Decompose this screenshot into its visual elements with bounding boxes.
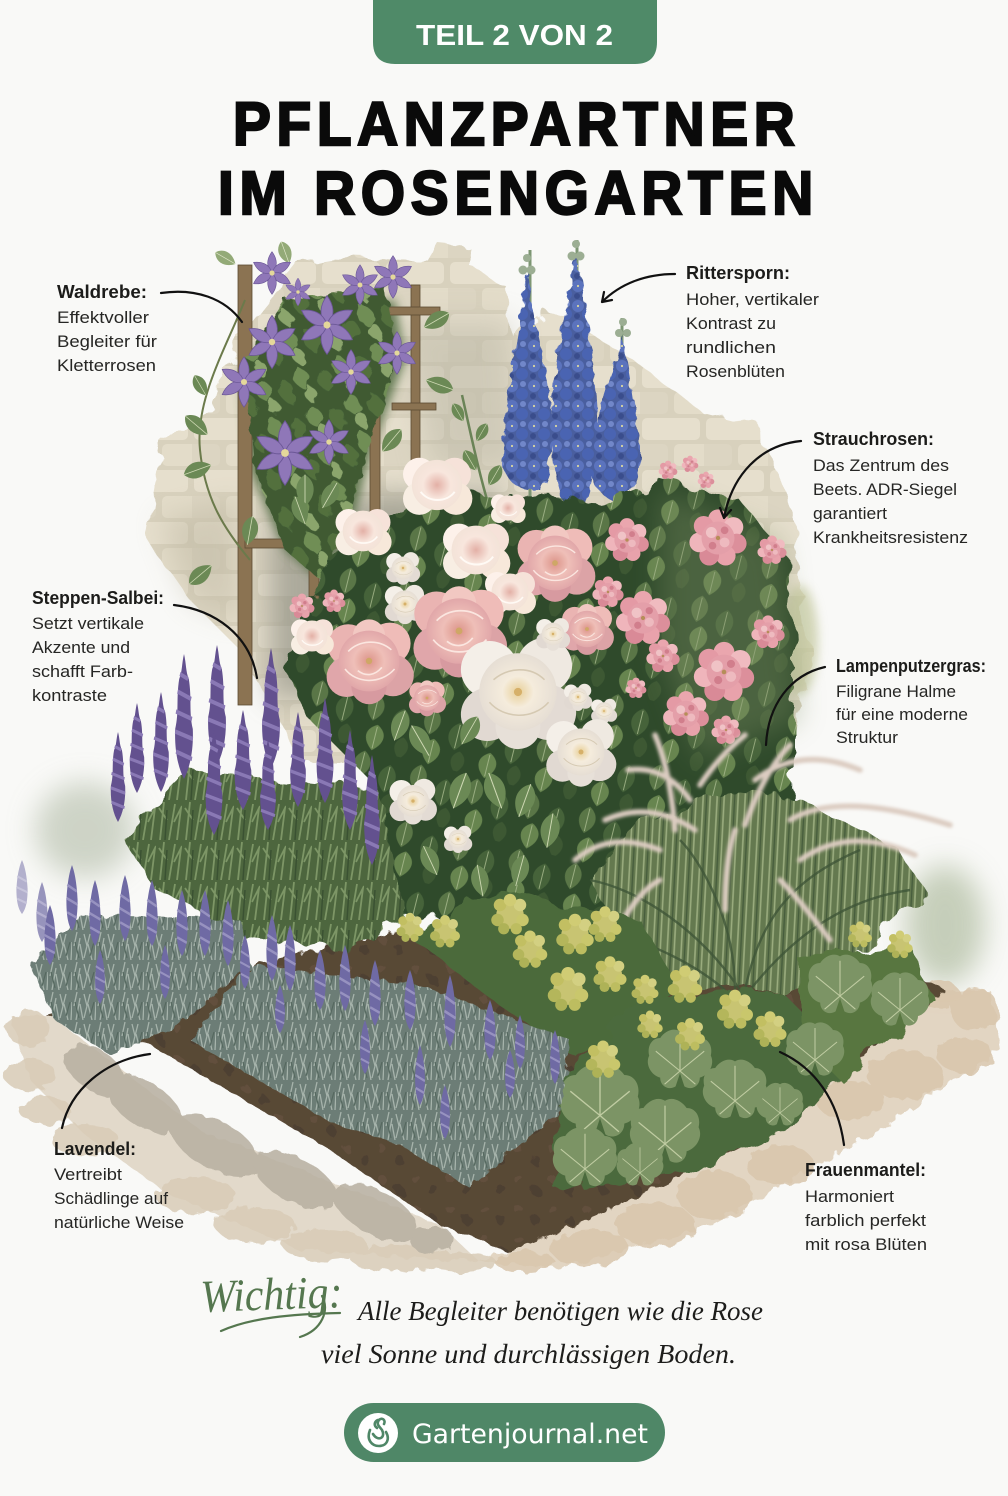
label: Waldrebe xyxy=(57,282,157,375)
label: Rittersporn: rundlichen xyxy=(686,338,776,357)
label: Steppen-Salbei: Setzt vertikale xyxy=(32,614,144,633)
label: Rittersporn: Rosenblüten xyxy=(686,362,785,381)
label: Steppen-Salbei: Akzente und xyxy=(32,638,130,657)
label: Strauchrosen: Strauchrosen: xyxy=(813,429,934,449)
label: Rittersporn: Rittersporn: xyxy=(686,263,790,283)
lavender xyxy=(10,860,590,1200)
lady's mantle xyxy=(396,890,935,1190)
label: Steppen-Salbei xyxy=(32,588,164,705)
handwritten note: Alle Begleiter benötigen wie die Rose xyxy=(356,1296,763,1326)
label: Rittersporn xyxy=(686,263,819,381)
arrow: Steppen-Salbei xyxy=(174,605,257,678)
arrow: Waldrebe xyxy=(161,292,242,322)
delphinium spikes xyxy=(452,240,642,502)
label: Strauchrosen: Beets. ADR-Siegel xyxy=(813,480,957,499)
title badge: TEIL 2 VON 2 xyxy=(416,20,613,52)
label: Lavendel: natürliche Weise xyxy=(54,1213,184,1232)
brand pill xyxy=(344,1403,665,1462)
label: Steppen-Salbei: schafft Farb- xyxy=(32,662,133,681)
label: Lavendel: Lavendel: xyxy=(54,1139,136,1159)
label: Strauchrosen: Das Zentrum des xyxy=(813,456,949,475)
label: Waldrebe: Waldrebe: xyxy=(57,282,147,302)
paving stones xyxy=(4,981,1000,1272)
label: Waldrebe: Effektvoller xyxy=(57,308,149,327)
label: Lavendel xyxy=(54,1139,184,1232)
label: Lampenputzergras: für eine moderne xyxy=(836,705,968,724)
main title: IM ROSENGARTEN xyxy=(218,160,813,227)
label: Steppen-Salbei: Steppen-Salbei: xyxy=(32,588,164,608)
label: Lampenputzergras: Lampenputzergras: xyxy=(836,656,986,676)
label: Lavendel: Vertreibt xyxy=(54,1165,122,1184)
pheasant grass xyxy=(570,735,950,1000)
arrow: Strauchrosen xyxy=(720,441,801,518)
arrow: Lampenputzergras xyxy=(766,667,825,745)
label: Frauenmantel: farblich perfekt xyxy=(805,1211,926,1230)
rose bush foliage xyxy=(283,478,812,920)
handwritten note: Wichtig: xyxy=(200,1266,343,1322)
icon: brand logo xyxy=(358,1413,398,1453)
label: Lampenputzergras xyxy=(836,656,986,747)
main title: PFLANZPARTNER xyxy=(233,91,795,158)
label: Lavendel: Schädlinge auf xyxy=(54,1189,168,1208)
steppe sage xyxy=(100,645,420,960)
label: Waldrebe: Kletterrosen xyxy=(57,356,156,375)
trellis xyxy=(238,265,440,705)
arrow: Lavendel xyxy=(62,1054,150,1128)
label: Strauchrosen: Krankheitsresistenz xyxy=(813,528,968,547)
arrow: Rittersporn xyxy=(602,274,675,302)
brick wall xyxy=(145,242,814,764)
label: Strauchrosen xyxy=(813,429,968,547)
label: Rittersporn: Hoher, vertikaler xyxy=(686,290,819,309)
handwritten note: viel Sonne und durchlässigen Boden. xyxy=(321,1339,736,1369)
label: Frauenmantel: Harmoniert xyxy=(805,1187,894,1206)
garden illustration xyxy=(4,230,1000,1272)
label: Waldrebe: Begleiter für xyxy=(57,332,157,351)
arrow: Frauenmantel xyxy=(780,1052,844,1145)
background haze foliage xyxy=(35,585,985,985)
clematis foliage haze xyxy=(240,300,405,580)
label: Strauchrosen: garantiert xyxy=(813,504,887,523)
label: Frauenmantel: Frauenmantel: xyxy=(805,1160,926,1180)
label: Frauenmantel xyxy=(805,1160,927,1254)
brand pill: Gartenjournal.net xyxy=(412,1419,648,1450)
label: Steppen-Salbei: kontraste xyxy=(32,686,107,705)
handwritten note xyxy=(200,1266,763,1369)
soil bed xyxy=(45,930,945,1252)
label: Lampenputzergras: Filigrane Halme xyxy=(836,682,956,701)
shrub roses xyxy=(290,456,787,898)
label: Rittersporn: Kontrast zu xyxy=(686,314,776,333)
label: Frauenmantel: mit rosa Blüten xyxy=(805,1235,927,1254)
main title xyxy=(218,91,813,227)
title badge xyxy=(373,0,657,64)
clematis climber xyxy=(180,239,456,590)
label: Lampenputzergras: Struktur xyxy=(836,728,898,747)
